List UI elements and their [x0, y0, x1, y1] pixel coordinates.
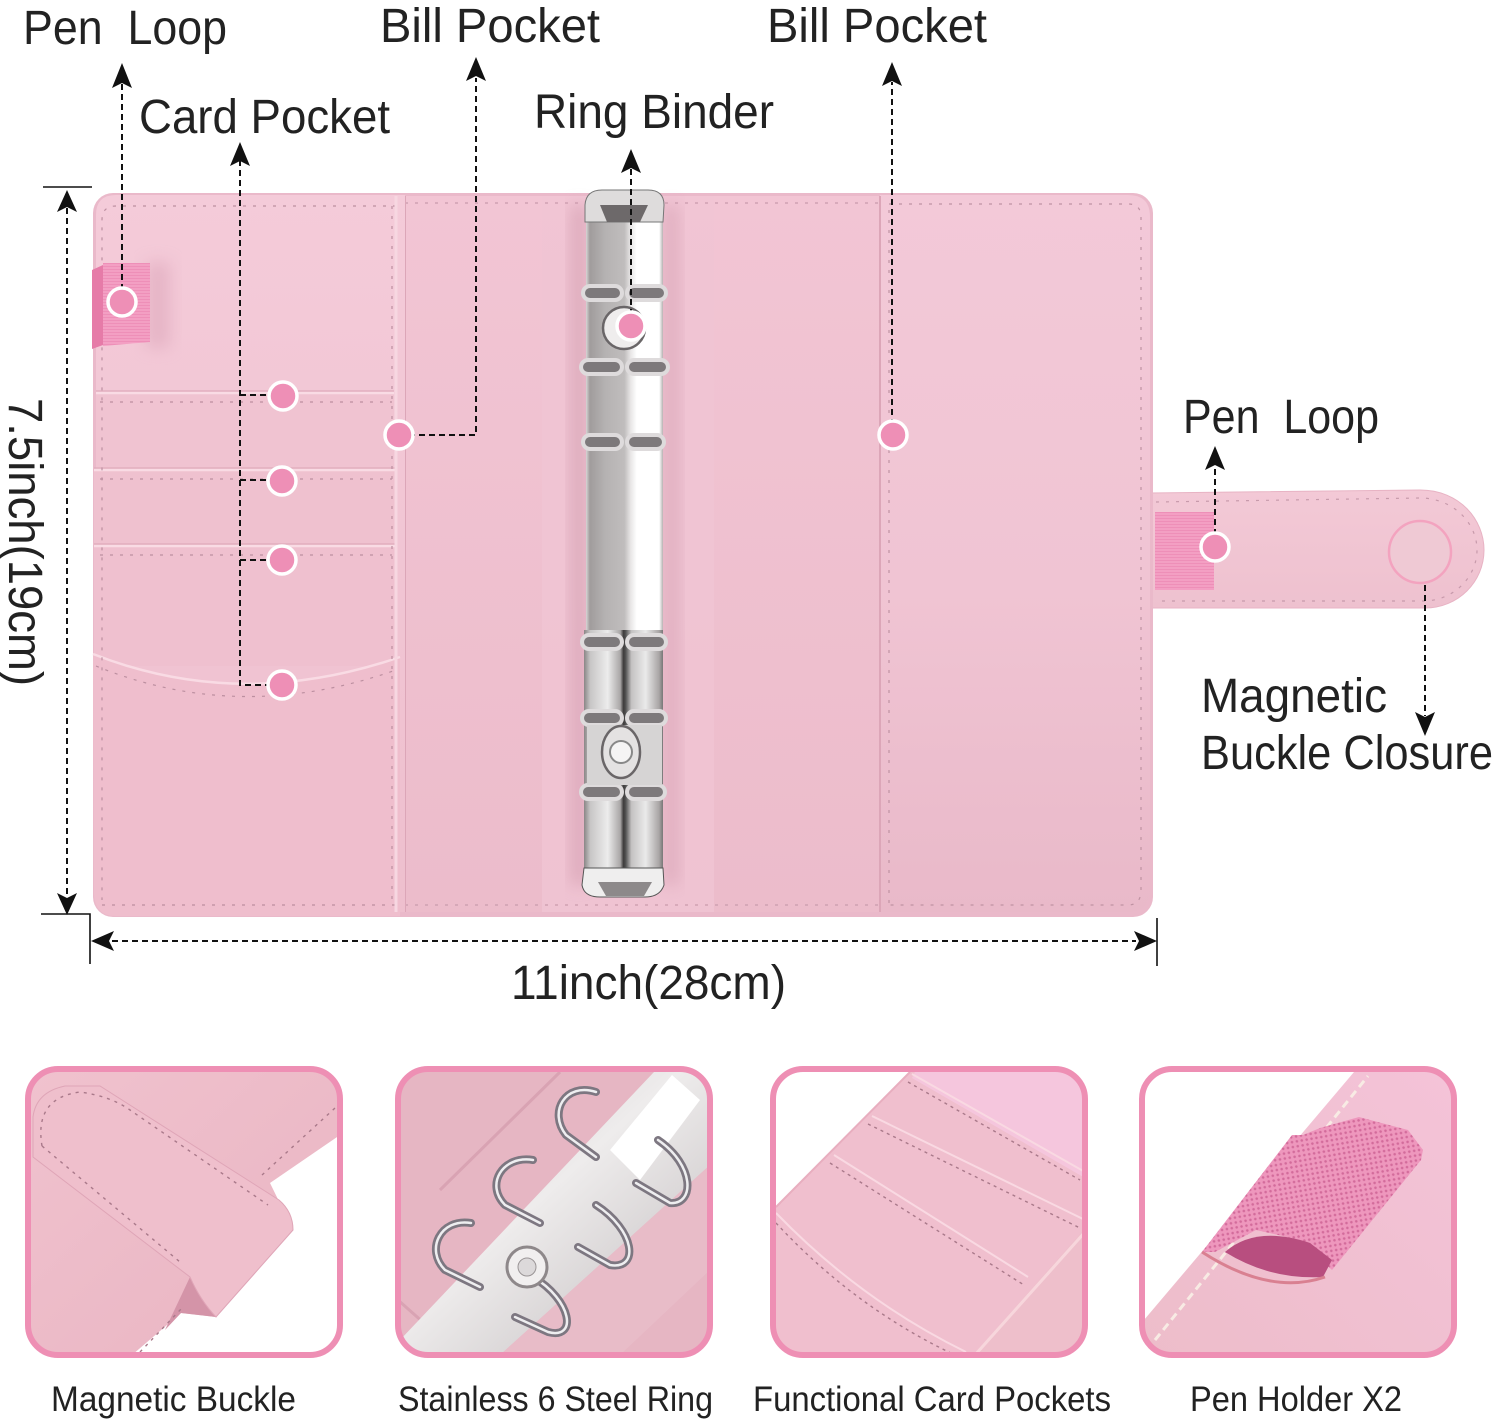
elastic loop on strap	[1155, 512, 1214, 590]
labels: Magnetic	[1201, 670, 1387, 723]
leader lines	[67, 78, 1425, 941]
pen loop left	[92, 262, 170, 349]
cover leather	[28, 1069, 340, 1355]
thumbnail: magnetic buckle	[28, 1069, 340, 1355]
labels	[0, 0, 1493, 1010]
top cap	[585, 190, 664, 222]
binder illustration	[92, 190, 1484, 917]
strap with magnetic buckle	[1150, 490, 1484, 608]
centre panels	[405, 196, 880, 912]
arrowheads	[57, 57, 1435, 951]
captions: Magnetic Buckle	[51, 1380, 296, 1419]
labels: Pen Loop	[1183, 391, 1379, 444]
labels: Pen Loop	[23, 2, 227, 55]
bottom cap	[582, 868, 664, 897]
callout dots	[108, 288, 1229, 699]
captions: Pen Holder X2	[1190, 1380, 1402, 1419]
labels: Bill Pocket	[767, 0, 987, 53]
dimension ticks	[41, 187, 1157, 966]
labels: Bill Pocket	[380, 0, 600, 53]
strap leather	[33, 1086, 293, 1317]
captions: Stainless 6 Steel Ring	[398, 1380, 713, 1419]
right panel	[880, 195, 1150, 912]
thumbnail: card pockets	[773, 1069, 1085, 1355]
captions	[51, 1380, 1402, 1419]
captions: Functional Card Pockets	[753, 1380, 1111, 1419]
binder cover	[93, 193, 1153, 917]
left panel	[96, 195, 405, 912]
thumbnail: steel rings	[398, 1069, 710, 1355]
thumbnail: pen holder	[1142, 1069, 1454, 1355]
labels: 11inch(28cm)	[511, 957, 786, 1010]
elastic	[1202, 1117, 1423, 1270]
ring binder metal	[572, 190, 678, 897]
card pockets	[93, 196, 400, 916]
labels: Card Pocket	[139, 91, 390, 144]
labels: Ring Binder	[534, 86, 774, 139]
rings	[581, 286, 668, 799]
